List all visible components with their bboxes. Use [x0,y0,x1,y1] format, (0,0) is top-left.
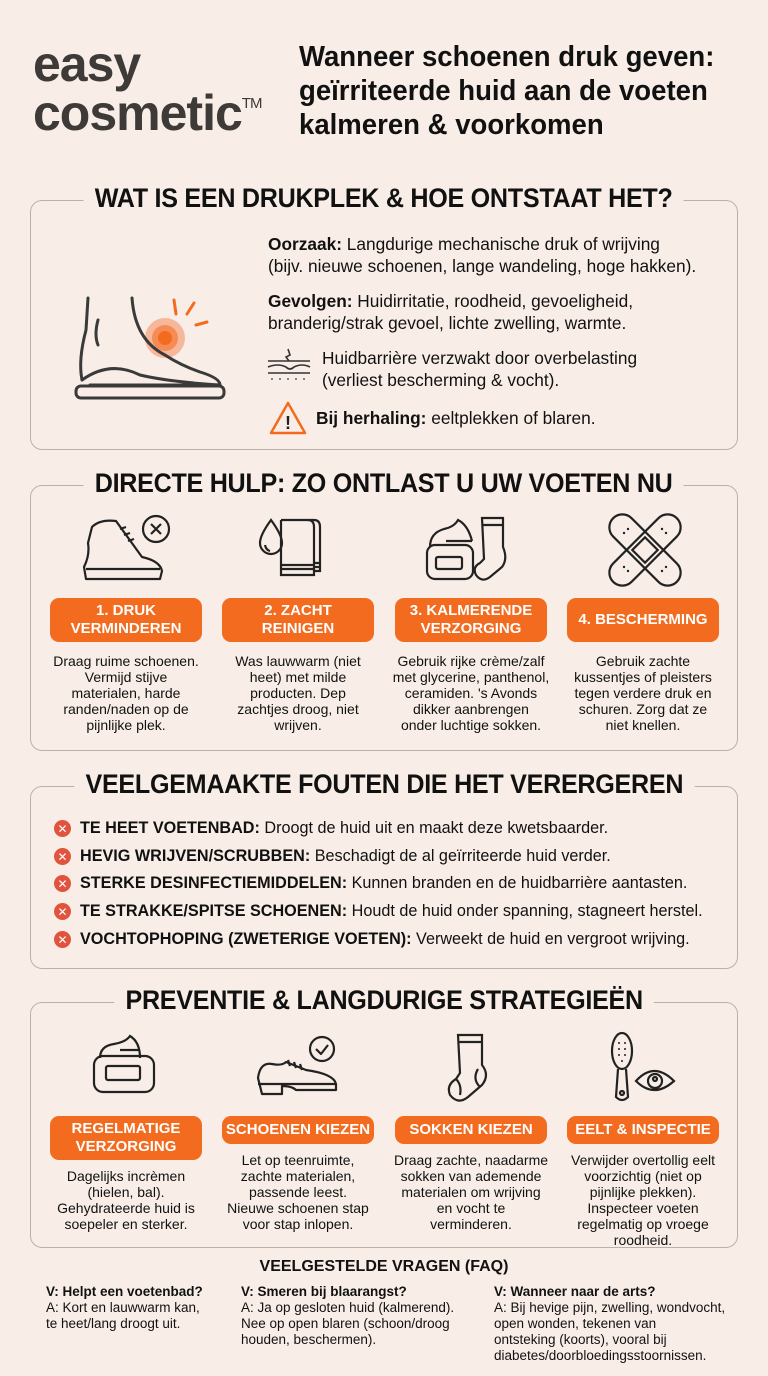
text: step 3 [393,653,549,733]
text: schoenen: Nieuwe schoenen stap [227,1200,369,1216]
faq: blaarangst: V: Smeren bij blaarangst? [241,1284,407,1299]
faq: arts: open wonden, tekenen van [494,1316,656,1331]
text: schoenen [227,1152,369,1232]
list: mistakes: TE HEET VOETENBAD: [80,819,260,837]
badge: zacht reinigen: REINIGEN [262,620,334,637]
faq: voetenbad [46,1284,203,1331]
text: step 4 [574,653,712,733]
text: eelt: Verwijder overtollig eelt [571,1152,715,1168]
text: oorzaak: Oorzaak: Langdurige mechanische druk of wrijving [268,234,660,254]
badge: regelmatige verzorging: VERZORGING [76,1138,176,1155]
faq: blaarangst: Nee op open blaren (schoon/droog [241,1316,450,1331]
badge: schoenen kiezen [222,1116,374,1144]
icon: bandage [608,513,682,587]
list: mistakes: ✕ [57,850,68,864]
text: sokken: materialen om wrijving [401,1184,541,1200]
title: Wanneer schoenen druk geven: [299,41,714,73]
text: step 3: dikker aanbrengen [413,701,529,717]
panel: fouten [30,786,738,969]
faq: arts: diabetes/doorbloedingsstoornissen. [494,1348,706,1363]
text: step 1: randen/naden op de [63,701,189,717]
icon: cream and sock [426,516,506,581]
text: step 2: zachtjes droog, niet [237,701,359,717]
text: gevolgen [268,291,633,333]
heading: section 1: WAT IS EEN DRUKPLEK & HOE ONTSTAAT HET? [95,183,673,213]
heading: section 4: PREVENTIE & LANGDURIGE STRATEGIEËN [125,985,643,1015]
badge: regelmatige verzorging [50,1116,202,1160]
text: step 1: Vermijd stijve [85,669,167,685]
text: schoenen: Let op teenruimte, [242,1152,354,1168]
text: gevolgen: Gevolgen: Huidirritatie, roodheid, gevoeligheid, [268,291,633,311]
badge: regelmatige verzorging: REGELMATIGE [72,1120,180,1137]
list: mistakes: VOCHTOPHOPING (ZWETERIGE VOETEN): [80,930,412,948]
panel: wat is een drukplek [30,200,738,450]
faq: blaarangst [241,1284,454,1347]
badge: kalmerende verzorging [395,598,547,642]
text: huidbarriere: (verliest bescherming & vocht). [322,370,559,390]
list: mistakes: Beschadigt de al geïrriteerde huid verder. [315,847,611,865]
heading: section 3: VEELGEMAAKTE FOUTEN DIE HET VERERGEREN [85,769,683,799]
icon: warning: ! [285,413,291,433]
text: verzorging: (hielen, bal). [87,1184,165,1200]
text: step 3: onder luchtige sokken. [401,717,541,733]
text: schoenen: zachte materialen, [241,1168,355,1184]
heading: section 2: DIRECTE HULP: ZO ONTLAST U UW VOETEN NU [95,468,673,498]
icon: drop and towel [258,518,322,576]
faq: voetenbad: te heet/lang droogt uit. [46,1316,180,1331]
list: mistakes [54,819,703,948]
faq: blaarangst: A: Ja op gesloten huid (kalmerend). [241,1300,454,1315]
faq: voetenbad: V: Helpt een voetenbad? [46,1284,203,1299]
title: geïrriteerde huid aan de voeten [299,75,708,107]
text: verzorging: Gehydrateerde huid is [57,1200,195,1216]
text: step 2: heet) met milde [250,669,346,685]
text: eelt [571,1152,715,1248]
text: step 2: producten. Dep [250,685,346,701]
icon: skin barrier [268,348,310,380]
icon: boot with x [82,514,170,580]
title: kalmeren & voorkomen [299,109,604,141]
text: step 1: materialen, harde [72,685,180,701]
badge: bescherming: 4. BESCHERMING [578,611,708,628]
text: schoenen: voor stap inlopen. [243,1216,353,1232]
badge: sokken kiezen: SOKKEN KIEZEN [409,1121,533,1138]
icon: sock [448,1034,488,1102]
list: mistakes: TE STRAKKE/SPITSE SCHOENEN: [80,902,347,920]
text: oorzaak: (bijv. nieuwe schoenen, lange wandeling, hoge hakken). [268,256,696,276]
text: eelt: Inspecteer voeten [587,1200,699,1216]
text: step 4: Gebruik zachte [596,653,690,669]
badge: druk verminderen [50,598,202,642]
badge: sokken kiezen [395,1116,547,1144]
icon: warning [270,402,306,434]
text: eelt: voorzichtig (niet op [584,1168,702,1184]
logo: easy [33,36,140,92]
list: mistakes: Houdt de huid onder spanning, stagneert herstel. [352,902,703,920]
text: oorzaak [268,234,696,276]
list: mistakes: HEVIG WRIJVEN/SCRUBBEN: [80,847,310,865]
badge: druk verminderen: VERMINDEREN [71,620,181,637]
text: bij herhaling: Bij herhaling: eeltplekken of blaren. [316,408,596,428]
badge: kalmerende verzorging: VERZORGING [421,620,521,637]
text: step 2 [235,653,361,733]
faq: arts: V: Wanneer naar de arts? [494,1284,656,1299]
badge: eelt & inspectie: EELT & INSPECTIE [575,1121,711,1138]
faq: blaarangst: houden, beschermen). [241,1332,376,1347]
text: sokken [394,1152,548,1232]
faq: arts [494,1284,725,1363]
text: sokken: sokken van ademende [401,1168,541,1184]
icon: foot file and eye [610,1032,676,1102]
icon: cream jar [92,1034,156,1094]
logo: cosmeticTM [33,85,261,141]
text: huidbarriere: Huidbarrière verzwakt door overbelasting [322,348,637,368]
icon: shoe with check [256,1036,338,1096]
list: mistakes: STERKE DESINFECTIEMIDDELEN: [80,874,347,892]
text: verzorging [57,1168,195,1232]
text: step 3: Gebruik rijke crème/zalf [397,653,545,669]
text: step 4: kussentjes of pleisters [574,669,712,685]
faq: voetenbad: A: Kort en lauwwarm kan, [46,1300,200,1315]
badge: bescherming [567,598,719,642]
list: mistakes: Verweekt de huid en vergroot wrijving. [416,930,690,948]
text: sokken: Draag zachte, naadarme [394,1152,548,1168]
text: step 1: Draag ruime schoenen. [53,653,199,669]
text: eelt: roodheid. [614,1232,672,1248]
text: step 2: wrijven. [274,717,322,733]
text: step 1 [53,653,199,733]
badge: zacht reinigen: 2. ZACHT [264,602,332,619]
badge: kalmerende verzorging: 3. KALMERENDE [410,602,532,619]
text: verzorging: Dagelijks incrèmen [67,1168,185,1184]
list: mistakes: ✕ [57,904,68,918]
title [299,41,714,141]
heading: faq: VEELGESTELDE VRAGEN (FAQ) [260,1258,508,1275]
text: sokken: en vocht te [437,1200,505,1216]
list: mistakes: Kunnen branden en de huidbarrière aantasten. [352,874,687,892]
text: step 4: tegen verdere druk en [574,685,711,701]
list: mistakes: ✕ [57,932,68,946]
text: verzorging: soepeler en sterker. [65,1216,187,1232]
text: step 3: ceramiden. 's Avonds [405,685,537,701]
list: mistakes: ✕ [57,876,68,890]
text: eelt: regelmatig op vroege [577,1216,709,1232]
text: step 1: pijnlijke plek. [86,717,166,733]
text: huidbarriere [322,348,637,390]
text: step 3: met glycerine, panthenol, [393,669,549,685]
text: sokken: verminderen. [430,1216,512,1232]
text: eelt: pijnlijke plekken). [590,1184,696,1200]
badge: schoenen kiezen: SCHOENEN KIEZEN [226,1121,370,1138]
badge: druk verminderen: 1. DRUK [96,602,156,619]
text: step 2: Was lauwwarm (niet [235,653,361,669]
faq: arts: A: Bij hevige pijn, zwelling, wondvocht, [494,1300,725,1315]
text: schoenen: passende leest. [249,1184,347,1200]
panel: preventie [30,1002,738,1248]
logo [33,36,262,141]
icon: foot in shoe [74,296,226,400]
list: mistakes: ✕ [57,822,68,836]
badge: eelt & inspectie [567,1116,719,1144]
list: mistakes: Droogt de huid uit en maakt deze kwetsbaarder. [264,819,608,837]
faq: arts: ontsteking (koorts), vooral bij [494,1332,667,1347]
badge: zacht reinigen [222,598,374,642]
panel: directe hulp [30,485,738,751]
text: step 4: schuren. Zorg dat ze [579,701,707,717]
text: step 4: niet knellen. [606,717,680,733]
text: gevolgen: branderig/strak gevoel, lichte zwelling, warmte. [268,313,626,333]
